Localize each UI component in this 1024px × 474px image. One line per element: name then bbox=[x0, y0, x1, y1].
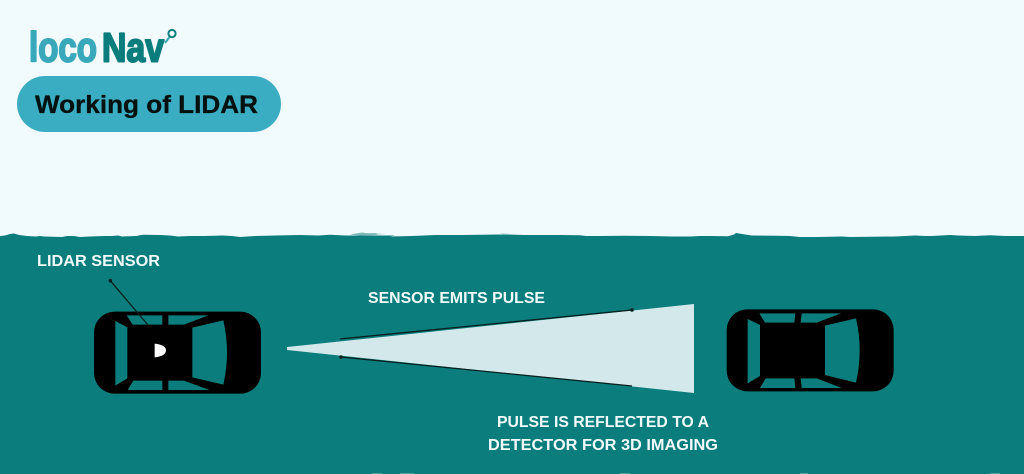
label: lidar sensor: LIDAR SENSOR bbox=[37, 253, 160, 270]
arrow: emitted pulse bbox=[340, 308, 634, 339]
bottom edge specks bbox=[372, 473, 1000, 474]
label: pulse reflected: PULSE IS REFLECTED TO A bbox=[497, 414, 709, 431]
title pill: Working of LIDAR bbox=[35, 91, 258, 119]
arrow: reflected pulse bbox=[339, 355, 632, 386]
panel: light background bbox=[0, 0, 1024, 237]
logo: Nav bbox=[102, 24, 164, 70]
icon: sensor bbox=[155, 344, 166, 357]
target car bbox=[727, 309, 894, 391]
panel: teal lower section with torn edge bbox=[0, 233, 1024, 474]
beam: lidar pulse bbox=[287, 304, 694, 393]
label: sensor emits pulse: SENSOR EMITS PULSE bbox=[368, 290, 545, 307]
logo bbox=[29, 24, 176, 70]
torn edge streaks bbox=[350, 232, 524, 236]
icon: logo pin bbox=[165, 30, 176, 43]
title pill bbox=[17, 76, 281, 132]
label: pulse reflected: DETECTOR FOR 3D IMAGING bbox=[488, 437, 718, 454]
car with lidar sensor bbox=[94, 312, 261, 394]
pointer: sensor line bbox=[108, 279, 148, 325]
label: pulse reflected bbox=[488, 414, 718, 454]
logo: loco bbox=[29, 24, 97, 70]
